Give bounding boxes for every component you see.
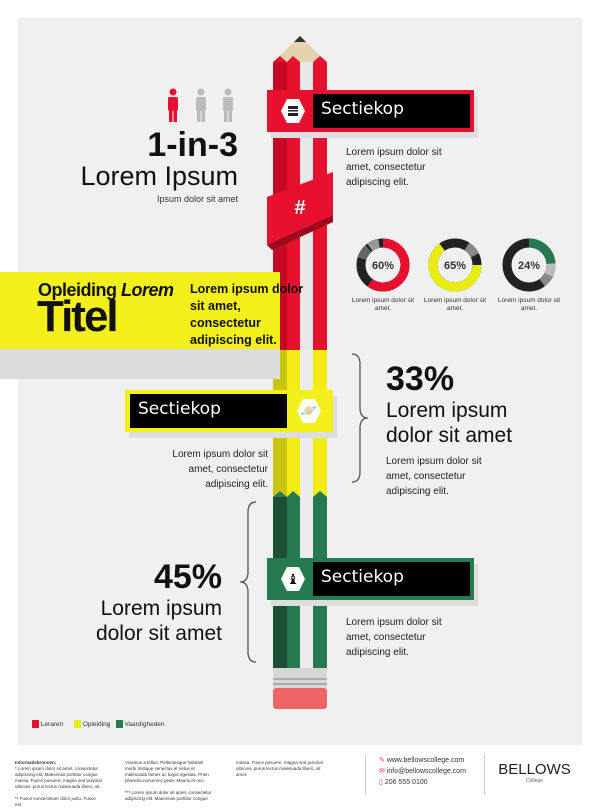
donut charts: 60% xyxy=(372,260,394,272)
ribbon with puzzle xyxy=(267,172,333,250)
stat 1-in-3 xyxy=(80,126,238,204)
header red xyxy=(267,90,474,132)
contact: ✎ www.bellowscollege.com xyxy=(379,757,464,764)
text: ** Fusce consectetuer dolor justo. Fusce est. xyxy=(15,796,96,807)
contact xyxy=(365,755,495,795)
footnotes: * Lorem ipsum dolor sit amet, consectetur adipiscing elit. Maecenas porttitor congue massa. Fusce posuere, magna sed pulvinar ultricies, purus lectus malesuada libero, sit. xyxy=(15,766,102,789)
footnotes: *** Lorem ipsum dolor sit amet, consectetur adipiscing elit. Maecenas porttitor congue xyxy=(125,790,212,801)
people icons xyxy=(168,88,233,122)
donut charts: Lorem ipsum dolor sit amet. xyxy=(352,297,414,312)
footnotes xyxy=(15,760,324,807)
yellow body xyxy=(273,350,327,498)
logo: BELLOWS xyxy=(498,761,571,778)
tip xyxy=(273,36,327,62)
header green: Sectiekop xyxy=(321,567,404,587)
stat 45%: 45% xyxy=(154,558,222,596)
yellow banner xyxy=(0,272,280,349)
contact: ✉ info@bellowscollege.com xyxy=(379,768,466,775)
legend: Leraren Opleiding Vaardigheden xyxy=(41,721,165,728)
donut charts: 65% xyxy=(444,260,466,272)
stat 33%: 33% xyxy=(386,360,454,398)
donut charts: Lorem ipsum dolor sit amet. xyxy=(424,297,486,312)
donut charts: Lorem ipsum dolor sit amet. xyxy=(498,297,560,312)
ribbon with puzzle: # xyxy=(294,197,306,219)
text green: Lorem ipsum dolor sit amet, consectetur adipiscing elit. xyxy=(346,617,442,658)
green body xyxy=(273,491,327,668)
stat 33%: Lorem ipsum dolor sit amet, consectetur adipiscing elit. xyxy=(386,456,482,497)
braces xyxy=(240,354,368,662)
donut charts: 24% xyxy=(518,260,540,272)
footnotes: Vivamus a tellus. Pellentesque habitant morbi tristique senectus et netus et malesuada fames ac turpis egestas. Proin pharetra nonummy pede. Mauris et orci. xyxy=(125,760,209,783)
stat 33%: Lorem ipsum dolor sit amet xyxy=(386,399,512,447)
header yellow: Sectiekop xyxy=(138,399,221,419)
stat 33% xyxy=(386,360,512,497)
stat 1-in-3: 1-in-3 xyxy=(147,126,238,164)
text yellow: Lorem ipsum dolor sit amet, consectetur adipiscing elit. xyxy=(172,449,268,490)
donut charts xyxy=(352,238,560,312)
header green xyxy=(267,558,474,600)
contact: ▯ 206 555 0100 xyxy=(379,779,428,786)
stat 1-in-3: Lorem Ipsum xyxy=(80,161,238,191)
header red: Sectiekop xyxy=(321,99,404,119)
logo: College xyxy=(526,778,543,784)
ferrule and eraser xyxy=(273,668,327,709)
header green: ♝ xyxy=(287,571,299,587)
footnotes: massa. Fusce posuere, magna sed pulvinar ultricies, purus lectus malesuada libero, sit amet. xyxy=(236,760,323,777)
stat 45% xyxy=(96,558,222,645)
yellow banner: Titel xyxy=(37,292,117,341)
stat 1-in-3: Ipsum dolor sit amet xyxy=(157,194,238,204)
logo xyxy=(484,755,584,795)
stat 45%: Lorem ipsum dolor sit amet xyxy=(96,597,222,645)
yellow banner: Opleiding Lorem xyxy=(38,280,174,300)
header yellow: 🪐 xyxy=(301,403,317,418)
red body xyxy=(273,56,327,360)
header yellow xyxy=(125,390,333,432)
footnotes: Informatiebronnen: xyxy=(15,760,56,765)
text red: Lorem ipsum dolor sit amet, consectetur adipiscing elit. xyxy=(346,147,442,188)
yellow banner: Lorem ipsum dolor sit amet, consectetur adipiscing elit. xyxy=(190,282,303,347)
